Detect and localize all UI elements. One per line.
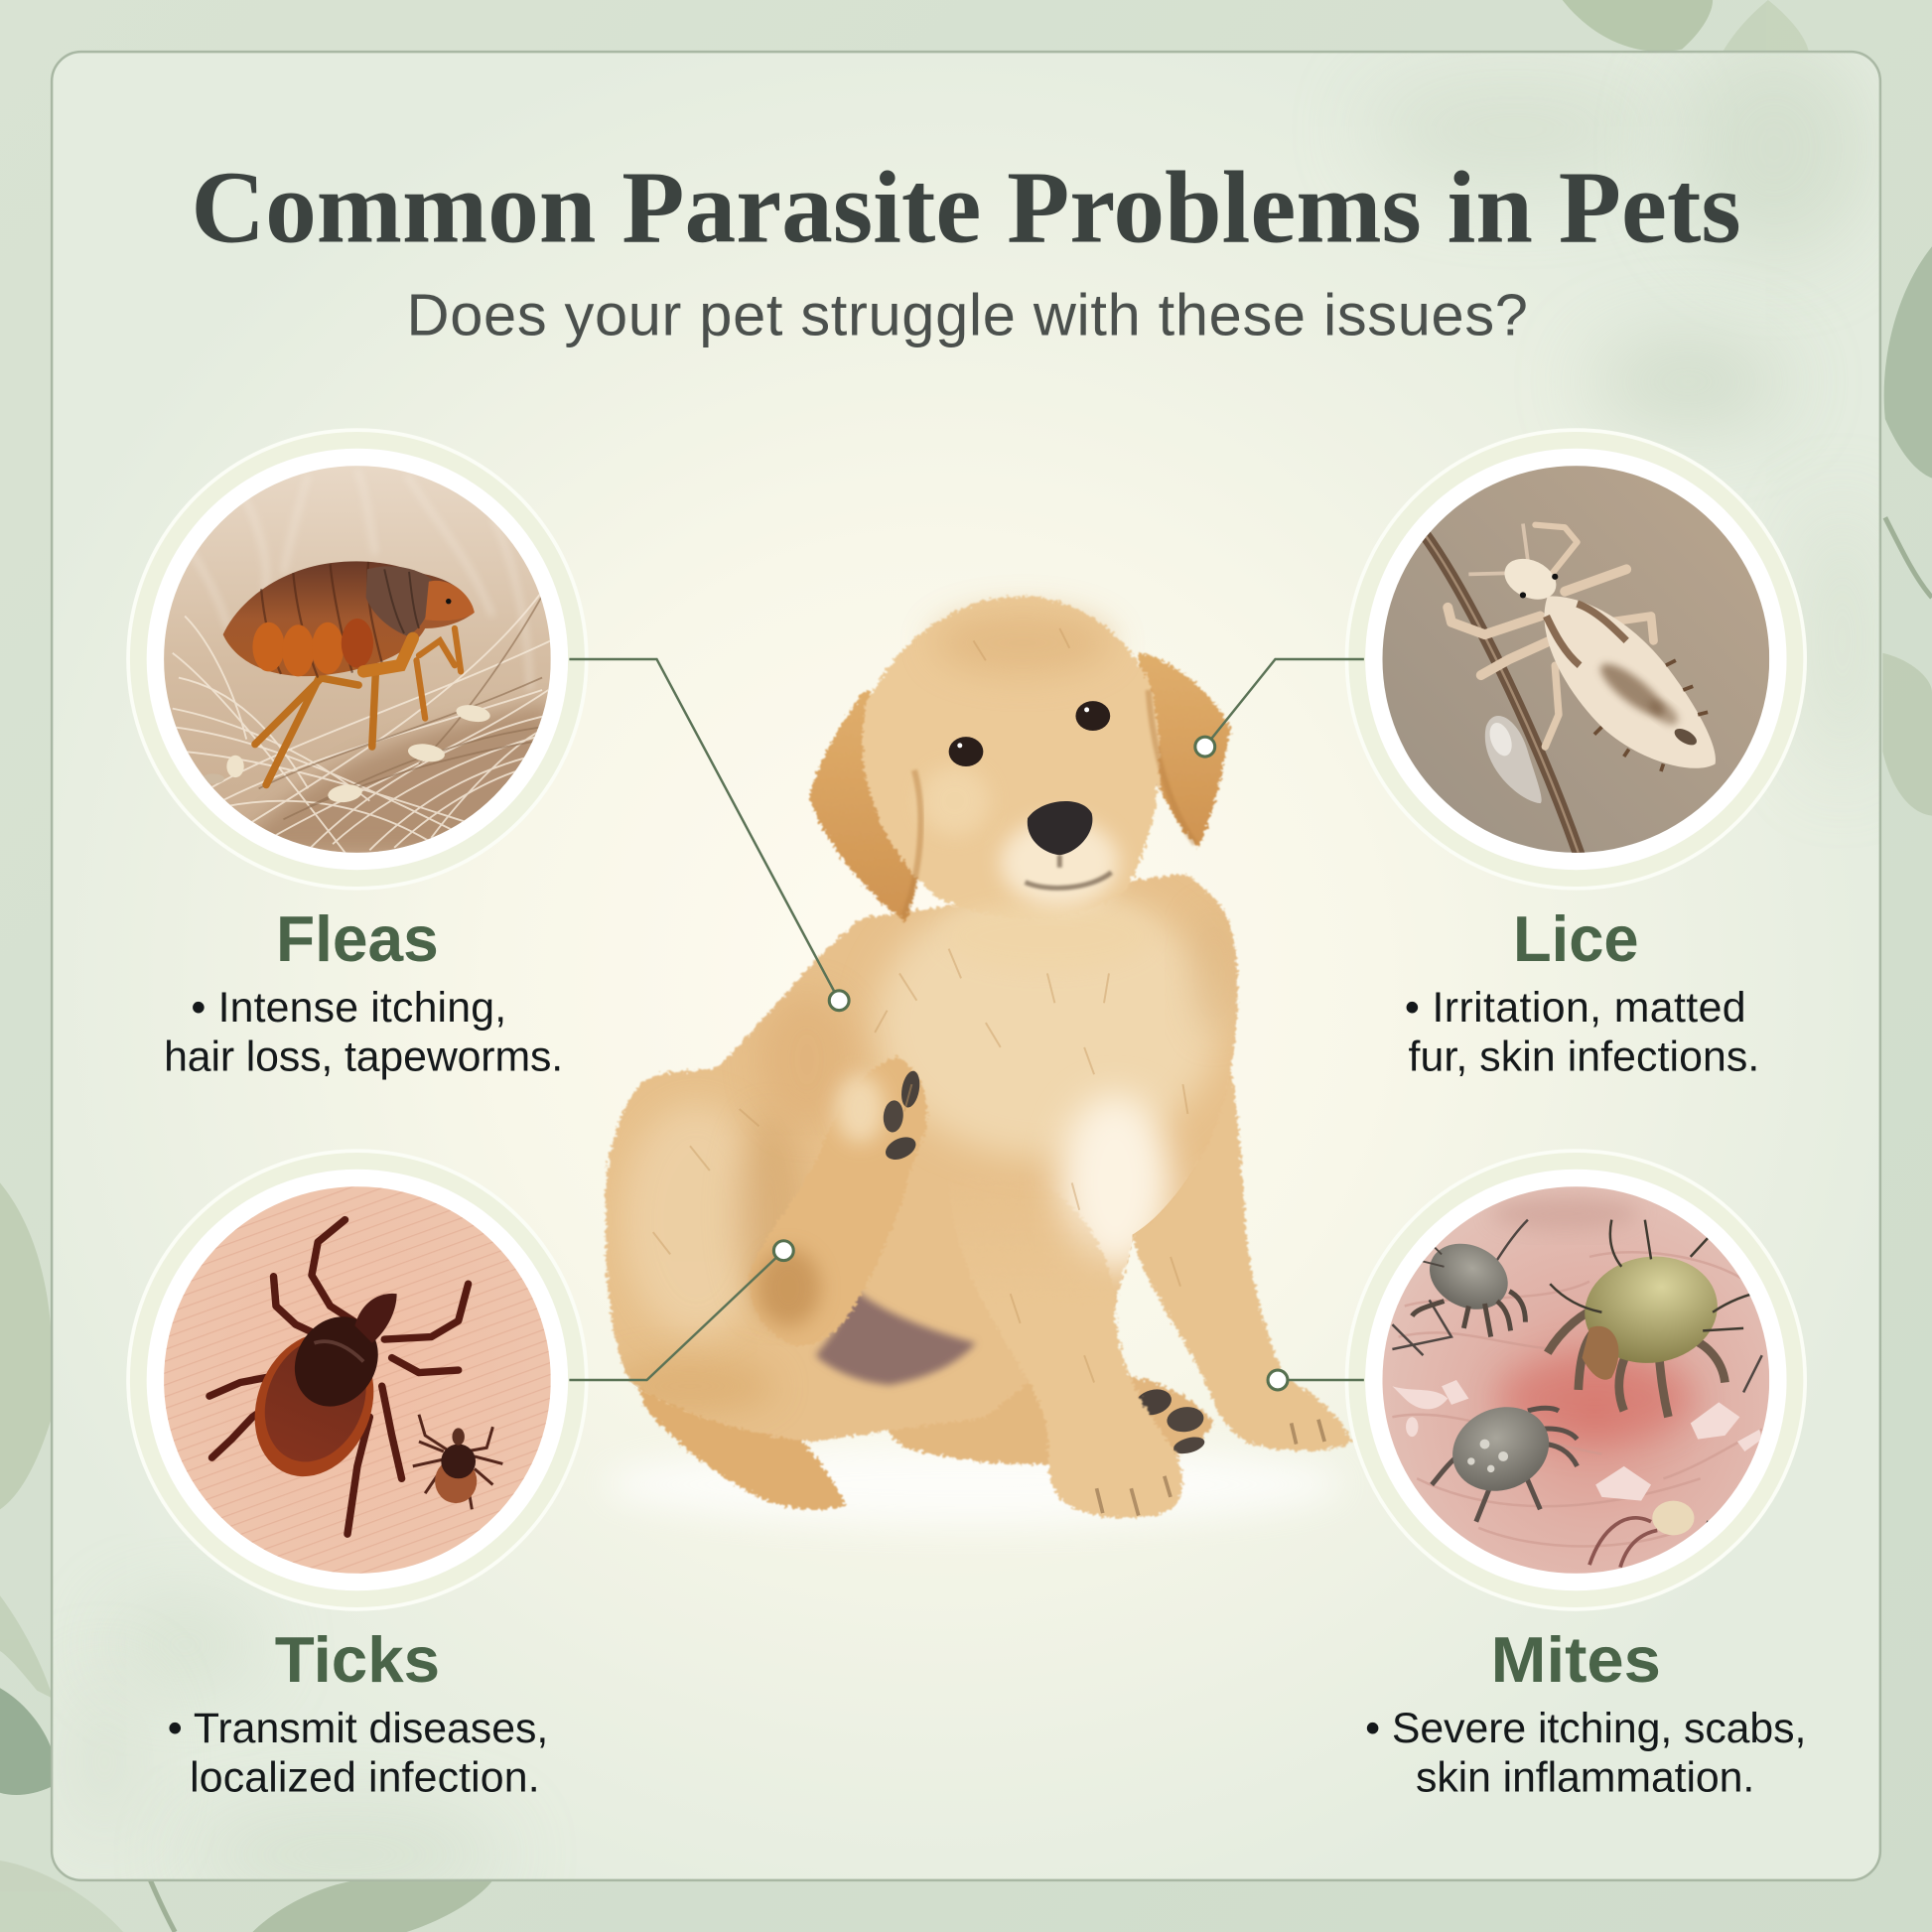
small tick [413,1415,502,1509]
panel: mites circle [1346,1151,1805,1609]
belly [816,1288,976,1385]
fleas label: hair loss, tapeworms. [164,1033,563,1080]
toe lines on front foot [1097,1420,1324,1516]
rear paw [1109,1375,1213,1456]
mites label: Mites [1491,1624,1661,1696]
rear paw pads [1132,1386,1174,1419]
fleas label: Fleas [276,903,439,975]
mites label: skin inflammation. [1416,1754,1754,1802]
left ear [809,690,922,921]
flea orange plates [252,619,373,676]
skin flakes [1392,1380,1762,1501]
ticks label: Ticks [275,1624,440,1696]
right ear [1140,653,1231,848]
fleas label: • Intense itching, [191,984,506,1032]
ticks label: localized infection. [190,1754,540,1802]
eyes [949,737,983,766]
torso shading [604,888,1236,1414]
rear lying leg [885,1365,1115,1464]
louse head and body [1505,558,1557,600]
partial mite bottom [1589,1501,1694,1568]
lice label: Lice [1513,903,1639,975]
raised hind leg [750,1057,927,1345]
title: Common Parasite Problems in Pets [191,149,1741,264]
fur strokes [653,628,1187,1382]
flea legs back [255,678,358,785]
tail [634,1374,847,1510]
raised paw pads [898,1069,922,1109]
large tick legs [209,1220,469,1534]
large tick abdomen [234,1314,394,1494]
large tick scutum [278,1301,394,1422]
flea body [223,561,475,676]
olive mite [1548,1220,1764,1417]
right front leg [1133,1047,1351,1450]
flea thorax [366,566,432,635]
torso silhouette [606,874,1237,1442]
grey mite front [1432,1393,1578,1522]
head [862,597,1160,919]
small grey mite [1412,1231,1525,1337]
nose and mouth [1028,801,1092,855]
ticks label [168,1624,548,1802]
mites label: • Severe itching, scabs, [1365,1705,1806,1752]
lice label: fur, skin infections. [1409,1033,1759,1080]
lice label [1405,903,1759,1080]
panel: ticks circle [128,1151,587,1609]
louse nit [1485,716,1542,803]
ticks label: • Transmit diseases, [168,1705,548,1752]
flea head [425,581,475,621]
hair strand [1423,532,1580,857]
flea front legs [363,638,413,671]
lice label: • Irritation, matted [1405,984,1746,1032]
panel: lice circle [1346,430,1805,889]
flea [223,561,475,785]
neck ruff [942,901,1152,971]
louse legs and antennae [1448,525,1654,747]
fleas label [164,903,563,1080]
subtitle: Does your pet struggle with these issues? [407,282,1528,348]
mites label [1365,1624,1806,1802]
left front leg [949,1167,1182,1518]
flea eggs [203,703,491,804]
puppy illustration [604,597,1351,1524]
connector lines [569,659,1364,1390]
head shading [934,612,1111,675]
panel: fleas circle [128,430,587,889]
hairs [1392,1220,1762,1534]
floor shadow [604,1446,1343,1524]
